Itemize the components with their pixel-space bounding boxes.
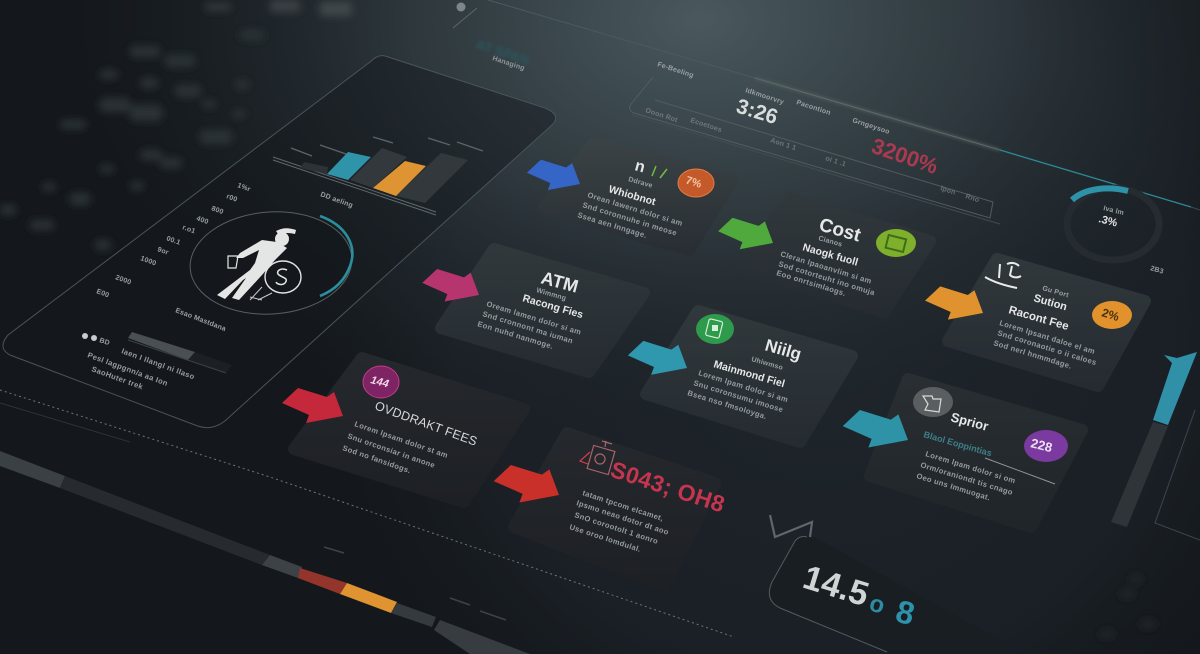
axis labels: Rno [964, 193, 980, 204]
body: Sod nerl hnmmdage. [992, 338, 1073, 371]
badge icon [913, 387, 953, 417]
body: Snd coronaotie o ii caloes [996, 328, 1098, 367]
subtitle 2: Sution [1032, 292, 1069, 313]
gauge label: Iva lm [1103, 205, 1125, 217]
body: Sod no fansidogs. [341, 443, 412, 475]
subtitle: Ddrave [627, 176, 653, 190]
axis labels: Ipon [939, 185, 956, 197]
body: Eon nuhd nanmoge. [476, 319, 555, 351]
body: Oeo uns Immuogat. [915, 471, 992, 502]
scale labels: r.o1 [181, 224, 196, 235]
dial caption: Esao Mastdana [174, 307, 227, 333]
body: Snd coronnuhe in meose [581, 200, 678, 238]
body [686, 368, 789, 421]
arrow: red right [494, 465, 559, 502]
icon glyphs [633, 157, 667, 178]
panel heading: teal: AT SPAN [474, 37, 531, 68]
label: Idkmoorvry [744, 87, 785, 106]
badge [363, 366, 399, 398]
right edge panel [1155, 410, 1200, 540]
badge: 228 [1029, 435, 1054, 455]
label: Fe-Beeling [656, 61, 694, 80]
body: Lorem lpam dolor si om [924, 449, 1017, 485]
left panel [3, 37, 556, 428]
body: SnO corootolt 1 aonro [573, 510, 659, 546]
bar chart caption: DD aeling [319, 191, 354, 210]
body: Snu coronsumu imoose [692, 378, 784, 414]
badge [1092, 301, 1132, 329]
card: whiobnot [543, 143, 732, 250]
body: Use oroo Iomdulal. [568, 522, 642, 554]
top chart panel [630, 61, 1000, 224]
legend text [86, 346, 196, 392]
arrow: pink [422, 269, 479, 302]
title: Sprior [949, 409, 990, 434]
card: overdraft fees [294, 358, 524, 502]
icon glyphs: n [633, 157, 647, 176]
value: 14.5 [799, 558, 873, 614]
card: atm [441, 249, 644, 372]
badge icon [696, 314, 734, 344]
body: Snu orconsiar in anone [346, 431, 436, 470]
lower solid divider [0, 403, 130, 442]
body: Lorem lpsant daloe el am [998, 318, 1096, 356]
arrow: orange [925, 286, 983, 320]
badge: 2% [1100, 305, 1121, 324]
body: Lorem lpsam dolor st am [353, 419, 449, 460]
subtitle: Gu Port [1041, 285, 1070, 300]
body [915, 449, 1017, 502]
label: Grngeysoo [851, 117, 890, 136]
body: Eoo onrtsimlaogs. [775, 268, 847, 298]
card: cost [740, 199, 930, 312]
legend text: Iaen I Ilangl ni Ilaso [120, 346, 196, 381]
axis labels: Ooon Rot [644, 107, 679, 124]
body: tatam tpcom elcamet, [581, 488, 665, 523]
panel sub-heading: Hanaging [491, 55, 525, 72]
icon: person with coin [217, 228, 301, 300]
subtitle 2: Racong Fies [521, 292, 585, 321]
subtitle 2: Naogk fuoll [801, 241, 860, 269]
arrow: teal middle [628, 341, 687, 375]
subtitle: Wimmng [535, 287, 567, 302]
body: Lorem lpam dolor si am [697, 368, 789, 404]
scale labels [95, 182, 251, 299]
title: OVDDRAKT FEES [373, 399, 479, 449]
scale labels: 9or [156, 246, 170, 257]
title: Whiobnot [607, 183, 657, 208]
bar chart [273, 137, 483, 215]
underline [985, 458, 1055, 484]
side value: 2B3 [1149, 265, 1164, 276]
subtitle: Cianos [817, 235, 843, 249]
icon: camera outline [580, 441, 615, 475]
title: ATM [539, 268, 581, 297]
body: Snd cronnont ma iuman [481, 309, 574, 345]
legend dots [82, 333, 111, 347]
percent metric: 3200% [868, 133, 941, 179]
badge [876, 229, 916, 257]
legend text: SaoHuter trek [90, 364, 145, 392]
vertical progress bar [1111, 352, 1197, 527]
dotted divider [0, 390, 734, 637]
arrow: red left [282, 388, 343, 423]
body: Orean lawern dolor si am [586, 190, 684, 228]
icon: mini line chart [770, 515, 812, 537]
scale labels: r00 [225, 193, 238, 204]
scale labels: E00 [95, 288, 110, 299]
body: Bsea nso fmsoloyga. [686, 388, 768, 421]
arrow: green [718, 218, 773, 249]
title: Cost [817, 215, 864, 247]
arrow: teal right [843, 410, 908, 447]
body: Ssea aen Inngage. [576, 210, 648, 240]
label: Pacontion [795, 99, 831, 117]
scale labels: 400 [195, 215, 209, 226]
value: 8 [892, 593, 918, 632]
amount heading: S043; OH8 [607, 456, 728, 517]
card: maintenance [646, 311, 852, 442]
icon [985, 263, 1021, 288]
body [476, 299, 583, 351]
body [341, 419, 449, 475]
badge: 7% [684, 174, 703, 191]
subtitle 2: Mainmond Fiel [712, 358, 786, 390]
subtitle: Uhiwmso [750, 356, 784, 372]
value: o [866, 590, 888, 620]
axis labels: Aon 1 1 [769, 137, 797, 152]
badge [1024, 430, 1068, 462]
scale labels: 2000 [114, 274, 132, 286]
badge: 144 [369, 374, 390, 390]
time metric: 3:26 [734, 95, 780, 129]
scale labels: 1%r [236, 182, 251, 194]
value [799, 558, 918, 632]
arrow: blue [527, 160, 580, 190]
body: Ipsmo neao dotor dt aoo [575, 498, 670, 537]
axis labels [644, 107, 980, 204]
scale labels: 00.1 [165, 235, 181, 247]
body [576, 190, 684, 240]
scale labels: 800 [210, 205, 224, 216]
card: red amount [514, 433, 728, 586]
teal subtitle: Blaol Eoppintias [922, 429, 993, 458]
body: Sod cotorteuht ino omuja [777, 259, 876, 297]
card: racont fee [948, 259, 1145, 386]
body [568, 488, 670, 554]
main horizon line [488, 0, 1200, 210]
progress bar [128, 332, 232, 373]
badge [678, 169, 714, 197]
legend text: Pesl lagpgnn/a aa Ion [86, 350, 169, 388]
bottom segmented band [0, 451, 530, 654]
legend dots: BD [98, 337, 111, 347]
axis labels: Ecoetoes [689, 117, 723, 134]
bottom stat card [769, 515, 1010, 654]
title: Racont Fee [1007, 304, 1070, 333]
card: sprior [870, 379, 1082, 527]
gauge value: .3% [1097, 213, 1119, 230]
title: Niilg [763, 336, 804, 364]
gauge [1067, 188, 1164, 276]
scale labels: 1000 [139, 255, 157, 267]
body: Orm/oraniondt tis cnago [919, 460, 1014, 497]
body: Oream lamen dolor si am [485, 299, 583, 337]
body: Cleran lpaoanvlim si am [779, 249, 873, 286]
dial with person icon [187, 206, 355, 320]
top marker dot [453, 2, 477, 28]
axis labels: oi 1 .1 [824, 155, 847, 168]
